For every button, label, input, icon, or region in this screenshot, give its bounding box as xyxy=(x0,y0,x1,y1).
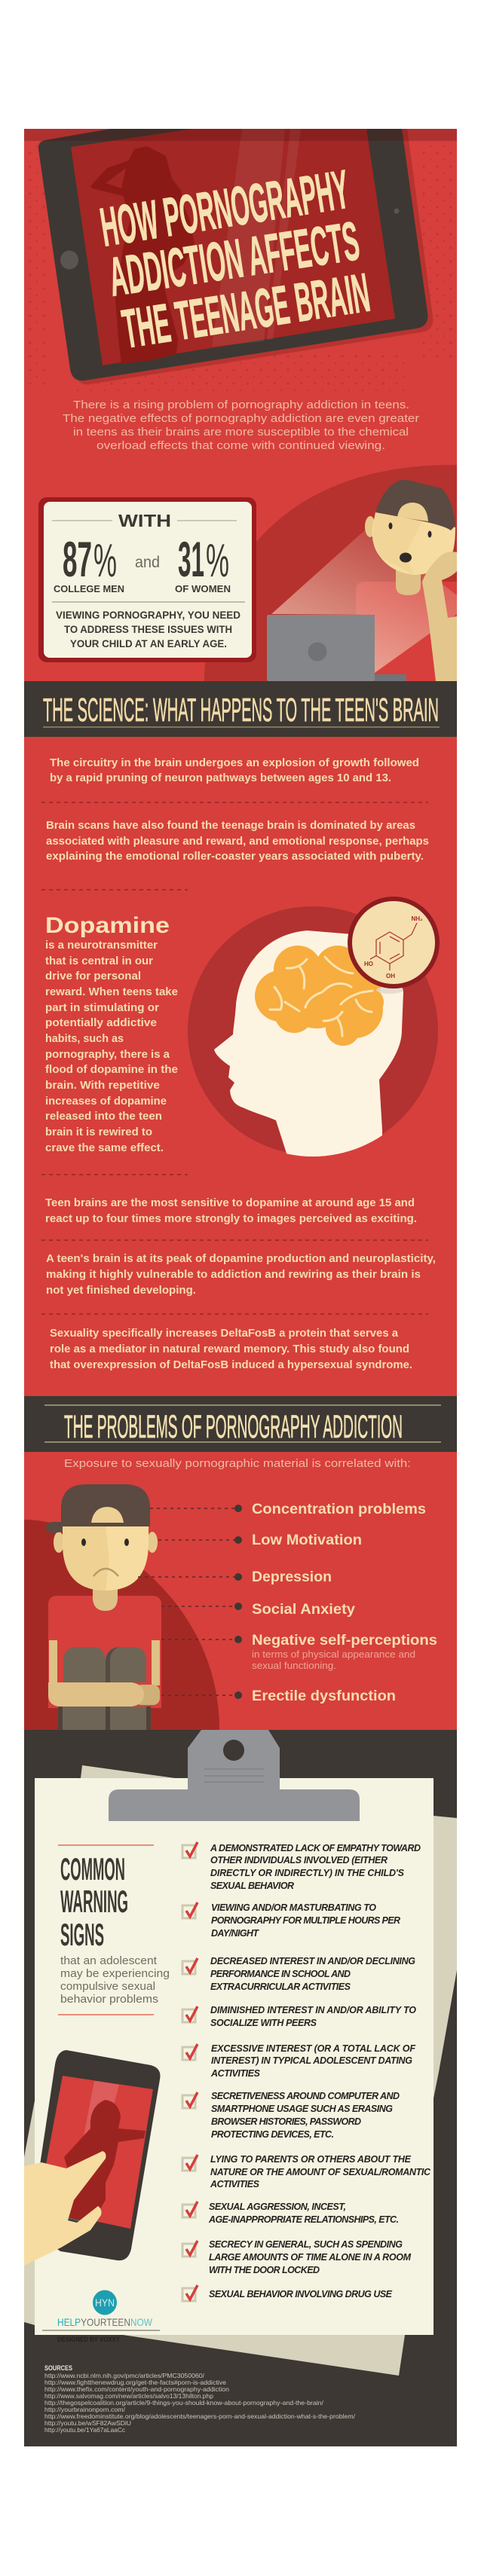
low motivation xyxy=(158,1532,362,1548)
panel: dark background xyxy=(24,1730,457,2446)
face shadow xyxy=(372,512,422,575)
hat xyxy=(375,480,455,530)
item 5: ACTIVITIES xyxy=(210,2068,261,2079)
sources: http://www.salvomag.com/new/articles/salvo13/13hilton.php xyxy=(44,2392,213,2400)
text: sensitivity xyxy=(45,1196,417,1225)
sources xyxy=(44,2364,356,2434)
concentration problems xyxy=(150,1502,426,1517)
intro: exposure: Exposure to sexually pornographic material is correlated with: xyxy=(64,1457,411,1470)
warning signs description: that an adolescent xyxy=(60,1954,158,1967)
phone and hand illustration xyxy=(24,2050,160,2266)
negative self-perceptions xyxy=(161,1633,437,1671)
item 5 xyxy=(182,2043,415,2079)
brain xyxy=(255,946,384,1046)
stats box xyxy=(38,497,256,662)
header tablet illustration xyxy=(38,129,433,384)
call to action xyxy=(56,610,240,649)
title xyxy=(100,170,371,348)
text: deltafosb: Sexuality specifically increases DeltaFosB a protein that serves a xyxy=(50,1327,399,1340)
warning signs heading: WARNING xyxy=(60,1884,128,1919)
and: and xyxy=(135,554,160,571)
text: brain scans: associated with pleasure and reward, and emotional response, perhaps xyxy=(46,835,429,848)
31 percent: % xyxy=(206,535,229,587)
text: dopamine: brain. With repetitive xyxy=(45,1079,160,1092)
item 4: SOCIALIZE WITH PEERS xyxy=(210,2018,317,2028)
text: brain scans: explaining the emotional roller-coaster years associated with puberty. xyxy=(46,850,424,863)
head silhouette xyxy=(214,930,403,1160)
dark circle xyxy=(188,906,438,1155)
hat opening xyxy=(91,1507,124,1523)
designer credit: DESIGNED BY VOXXY xyxy=(57,2336,121,2344)
tablet shadow xyxy=(44,129,433,384)
dark arc xyxy=(24,1520,219,1730)
home button xyxy=(60,250,78,270)
hat xyxy=(61,1484,150,1526)
text: dopamine: part in stimulating or xyxy=(45,1001,159,1014)
sad boy illustration xyxy=(24,1484,219,1730)
boy with laptop illustration xyxy=(204,465,457,681)
hand xyxy=(24,2151,106,2266)
intro text xyxy=(63,399,419,452)
item 3 xyxy=(182,1956,415,1992)
molecule badge xyxy=(348,897,440,994)
text: dopamine: drive for personal xyxy=(45,970,141,982)
text: circuitry: The circuitry in the brain undergoes an explosion of growth followed xyxy=(50,756,419,769)
item 2: DAY/NIGHT xyxy=(211,1928,259,1939)
low motivation: Low Motivation xyxy=(252,1532,362,1548)
checklist xyxy=(182,1842,431,2301)
negative self-perceptions: Negative self-perceptions xyxy=(252,1633,437,1649)
item 2: PORNOGRAPHY FOR MULTIPLE HOURS PER xyxy=(211,1915,400,1926)
item 4 xyxy=(182,2005,416,2028)
depression xyxy=(138,1569,332,1585)
molecule badge: OH xyxy=(386,973,395,979)
heading band: the problems xyxy=(24,1396,457,1452)
text: sensitivity: Teen brains are the most sensitive to dopamine at around age 15 and xyxy=(45,1196,415,1209)
negative self-perceptions: sexual functioning. xyxy=(252,1660,336,1671)
text: dopamine: released into the teen xyxy=(45,1110,162,1123)
warning signs description: behavior problems xyxy=(60,1993,158,2006)
arms xyxy=(49,1640,160,1685)
back paper xyxy=(24,1765,457,2376)
face xyxy=(63,1526,149,1591)
text: circuitry xyxy=(50,756,419,784)
negative self-perceptions: in terms of physical appearance and xyxy=(252,1649,415,1660)
neck xyxy=(396,569,421,595)
item 6: BROWSER HISTORIES, PASSWORD xyxy=(211,2116,361,2127)
text: dopamine xyxy=(45,913,178,1154)
sources: http://www.freedominstitute.org/blog/adolescents/teenagers-porn-and-sexual-addiction-what-s-the-problem/ xyxy=(44,2413,356,2420)
mouth xyxy=(400,553,412,562)
frown xyxy=(93,1569,118,1576)
silhouette xyxy=(64,2100,146,2223)
item 9: WITH THE DOOR LOCKED xyxy=(209,2265,320,2275)
text: neuroplasticity: not yet finished developing. xyxy=(46,1284,196,1297)
panel: red background xyxy=(24,129,457,1730)
logo: help your teen now: HELPYOURTEENNOW xyxy=(57,2316,153,2328)
item 8: AGE-INAPPROPRIATE RELATIONSHIPS, ETC. xyxy=(208,2214,399,2225)
87 percent: 87 xyxy=(63,531,92,587)
laptop xyxy=(267,615,406,681)
eyes xyxy=(389,523,431,538)
phone screen xyxy=(38,2076,153,2229)
halftone dots xyxy=(24,141,457,392)
hat brim xyxy=(46,1522,63,1533)
item 9: SECRECY IN GENERAL, SUCH AS SPENDING xyxy=(209,2239,403,2250)
text: dopamine: increases of dopamine xyxy=(45,1095,167,1108)
item 1: DIRECTLY OR INDIRECTLY) IN THE CHILD'S xyxy=(210,1868,405,1878)
sources: http://yourbrainonporn.com/ xyxy=(44,2406,126,2413)
item 6: SMARTPHONE USAGE SUCH AS ERASING xyxy=(211,2104,393,2114)
text: brain scans xyxy=(46,819,429,863)
item 3: DECREASED INTEREST IN AND/OR DECLINING xyxy=(210,1956,415,1966)
item 5: INTEREST) IN TYPICAL ADOLESCENT DATING xyxy=(211,2055,412,2066)
intro text: There is a rising problem of pornography addiction in teens. xyxy=(73,399,409,411)
ears xyxy=(54,1532,158,1553)
lower legs xyxy=(58,1707,151,1730)
sources: http://youtu.be/1Ya67aLaaCc xyxy=(44,2426,126,2434)
top band xyxy=(24,129,457,141)
eyes xyxy=(81,1539,129,1546)
item 6: SECRETIVENESS AROUND COMPUTER AND xyxy=(211,2091,400,2101)
face shadow xyxy=(63,1526,109,1591)
logo: help your teen now xyxy=(42,2290,160,2330)
item 9 xyxy=(182,2239,412,2275)
head and brain illustration xyxy=(188,897,440,1160)
item 6: PROTECTING DEVICES, ETC. xyxy=(211,2129,334,2140)
social anxiety: Social Anxiety xyxy=(252,1602,355,1618)
31 percent: 31 xyxy=(178,531,204,587)
dark arc xyxy=(204,465,457,681)
warning signs heading: COMMON xyxy=(60,1851,125,1887)
light beam xyxy=(271,527,457,673)
text: dopamine: brain it is rewired to xyxy=(45,1126,152,1138)
text: neuroplasticity: making it highly vulnerable to addiction and rewiring as their brain is xyxy=(46,1268,421,1281)
neck xyxy=(93,1586,118,1611)
text: dopamine: reward. When teens take xyxy=(45,985,178,998)
with heading: WITH xyxy=(118,511,171,530)
call to action: TO ADDRESS THESE ISSUES WITH xyxy=(64,624,232,635)
phone body xyxy=(30,2050,160,2260)
intro text: in teens as their brains are more susceptible to the chemical xyxy=(73,426,409,439)
item 3: EXTRACURRICULAR ACTIVITIES xyxy=(210,1982,351,1992)
college men: COLLEGE MEN xyxy=(54,583,124,594)
item 1: SEXUAL BEHAVIOR xyxy=(210,1881,294,1891)
problem list xyxy=(138,1502,437,1704)
text: circuitry: by a rapid pruning of neuron pathways between ages 10 and 13. xyxy=(50,772,391,784)
text: dopamine: Dopamine xyxy=(45,913,170,938)
item 4: DIMINISHED INTEREST IN AND/OR ABILITY TO xyxy=(210,2005,416,2015)
sources: http://thegospelcoalition.org/article/9-things-you-should-know-about-pornography-and-the-brain/ xyxy=(44,2399,324,2406)
sources: SOURCES xyxy=(44,2364,72,2372)
warning signs description xyxy=(60,1954,170,2006)
ear xyxy=(365,516,375,537)
item 5: EXCESSIVE INTEREST (OR A TOTAL LACK OF xyxy=(211,2043,415,2054)
shirt xyxy=(356,582,457,681)
molecule badge: NH₂ xyxy=(411,915,423,922)
item 7 xyxy=(182,2154,431,2189)
warning signs description: may be experiencing xyxy=(60,1967,170,1980)
item 1: A DEMONSTRATED LACK OF EMPATHY TOWARD xyxy=(210,1843,421,1853)
erectile dysfunction xyxy=(161,1688,396,1704)
item 6 xyxy=(182,2091,400,2140)
text: dopamine: pornography, there is a xyxy=(45,1048,170,1061)
knees xyxy=(63,1647,146,1682)
erectile dysfunction: Erectile dysfunction xyxy=(252,1688,396,1704)
warning signs heading xyxy=(58,1845,170,2015)
molecule badge: HO xyxy=(364,961,373,967)
arm and hand xyxy=(422,552,457,681)
item 10 xyxy=(182,2285,393,2301)
item 8 xyxy=(182,2202,399,2225)
text: deltafosb: role as a mediator in natural reward memory. This study also found xyxy=(50,1343,409,1355)
item 9: LARGE AMOUNTS OF TIME ALONE IN A ROOM xyxy=(209,2252,412,2263)
face xyxy=(372,512,455,575)
text: deltafosb: that overexpression of DeltaFosB induced a hypersexual syndrome. xyxy=(50,1358,412,1371)
sources: http://www.ncbi.nlm.nih.gov/pmc/articles/PMC3050060/ xyxy=(44,2372,205,2379)
item 8: SEXUAL AGGRESSION, INCEST, xyxy=(209,2202,346,2212)
sources: http://www.fightthenewdrug.org/get-the-facts#porn-is-addictive xyxy=(44,2379,226,2386)
text: neuroplasticity: A teen's brain is at its peak of dopamine production and neuroplasticity, xyxy=(46,1252,436,1265)
shirt xyxy=(48,1596,161,1708)
heading band: the science xyxy=(24,681,457,737)
item 7: ACTIVITIES xyxy=(210,2179,260,2189)
clip xyxy=(109,1730,360,1821)
text: dopamine: flood of dopamine in the xyxy=(45,1063,178,1076)
paper xyxy=(35,1778,434,2335)
text: deltafosb xyxy=(50,1327,412,1371)
text: dopamine: is a neurotransmitter xyxy=(45,939,158,952)
call to action: YOUR CHILD AT AN EARLY AGE. xyxy=(70,638,227,649)
item 2: VIEWING AND/OR MASTURBATING TO xyxy=(211,1902,376,1913)
clipboard xyxy=(24,1730,457,2376)
dopamine molecule xyxy=(370,923,417,970)
tablet body xyxy=(38,129,427,380)
call to action: VIEWING PORNOGRAPHY, YOU NEED xyxy=(56,610,240,621)
text: brain scans: Brain scans have also found the teenage brain is dominated by areas xyxy=(46,819,415,832)
social anxiety xyxy=(161,1602,355,1618)
sources: http://youtu.be/wSF82AwSDiU xyxy=(44,2419,131,2427)
brain folds xyxy=(270,957,372,1036)
warning signs heading: SIGNS xyxy=(60,1917,104,1952)
warning signs description: compulsive sexual xyxy=(60,1980,155,1993)
intro text: overload effects that come with continued viewing. xyxy=(97,439,385,452)
woman silhouette xyxy=(90,146,195,364)
item 7: NATURE OR THE AMOUNT OF SEXUAL/ROMANTIC xyxy=(210,2167,431,2177)
of women: OF WOMEN xyxy=(175,583,231,594)
sources: http://www.thefix.com/content/youth-and-pornography-addiction xyxy=(44,2385,229,2393)
item 1: OTHER INDIVIDUALS INVOLVED (EITHER xyxy=(210,1855,388,1866)
screen glare xyxy=(212,129,301,347)
text: dopamine: that is central in our xyxy=(45,955,153,967)
depression: Depression xyxy=(252,1569,332,1585)
87 percent: % xyxy=(93,535,117,587)
camera xyxy=(394,208,400,214)
item 1 xyxy=(182,1842,421,1891)
item 7: LYING TO PARENTS OR OTHERS ABOUT THE xyxy=(210,2154,412,2165)
text: neuroplasticity xyxy=(46,1252,436,1297)
screen glare xyxy=(68,2081,119,2223)
text: dopamine: potentially addictive xyxy=(45,1016,157,1029)
text: dopamine: crave the same effect. xyxy=(45,1141,164,1154)
logo: help your teen now: HYN xyxy=(95,2296,115,2309)
forearms xyxy=(48,1682,160,1707)
text: sensitivity: react up to four times more strongly to images perceived as exciting. xyxy=(45,1212,417,1225)
tablet screen xyxy=(71,129,395,365)
concentration problems: Concentration problems xyxy=(252,1502,426,1517)
item 10: SEXUAL BEHAVIOR INVOLVING DRUG USE xyxy=(209,2289,393,2299)
intro text: The negative effects of pornography addiction are even greater xyxy=(63,412,419,425)
item 2 xyxy=(182,1902,400,1939)
hat opening xyxy=(397,503,428,521)
text: dopamine: habits, such as xyxy=(45,1032,124,1045)
item 3: PERFORMANCE IN SCHOOL AND xyxy=(210,1969,351,1979)
